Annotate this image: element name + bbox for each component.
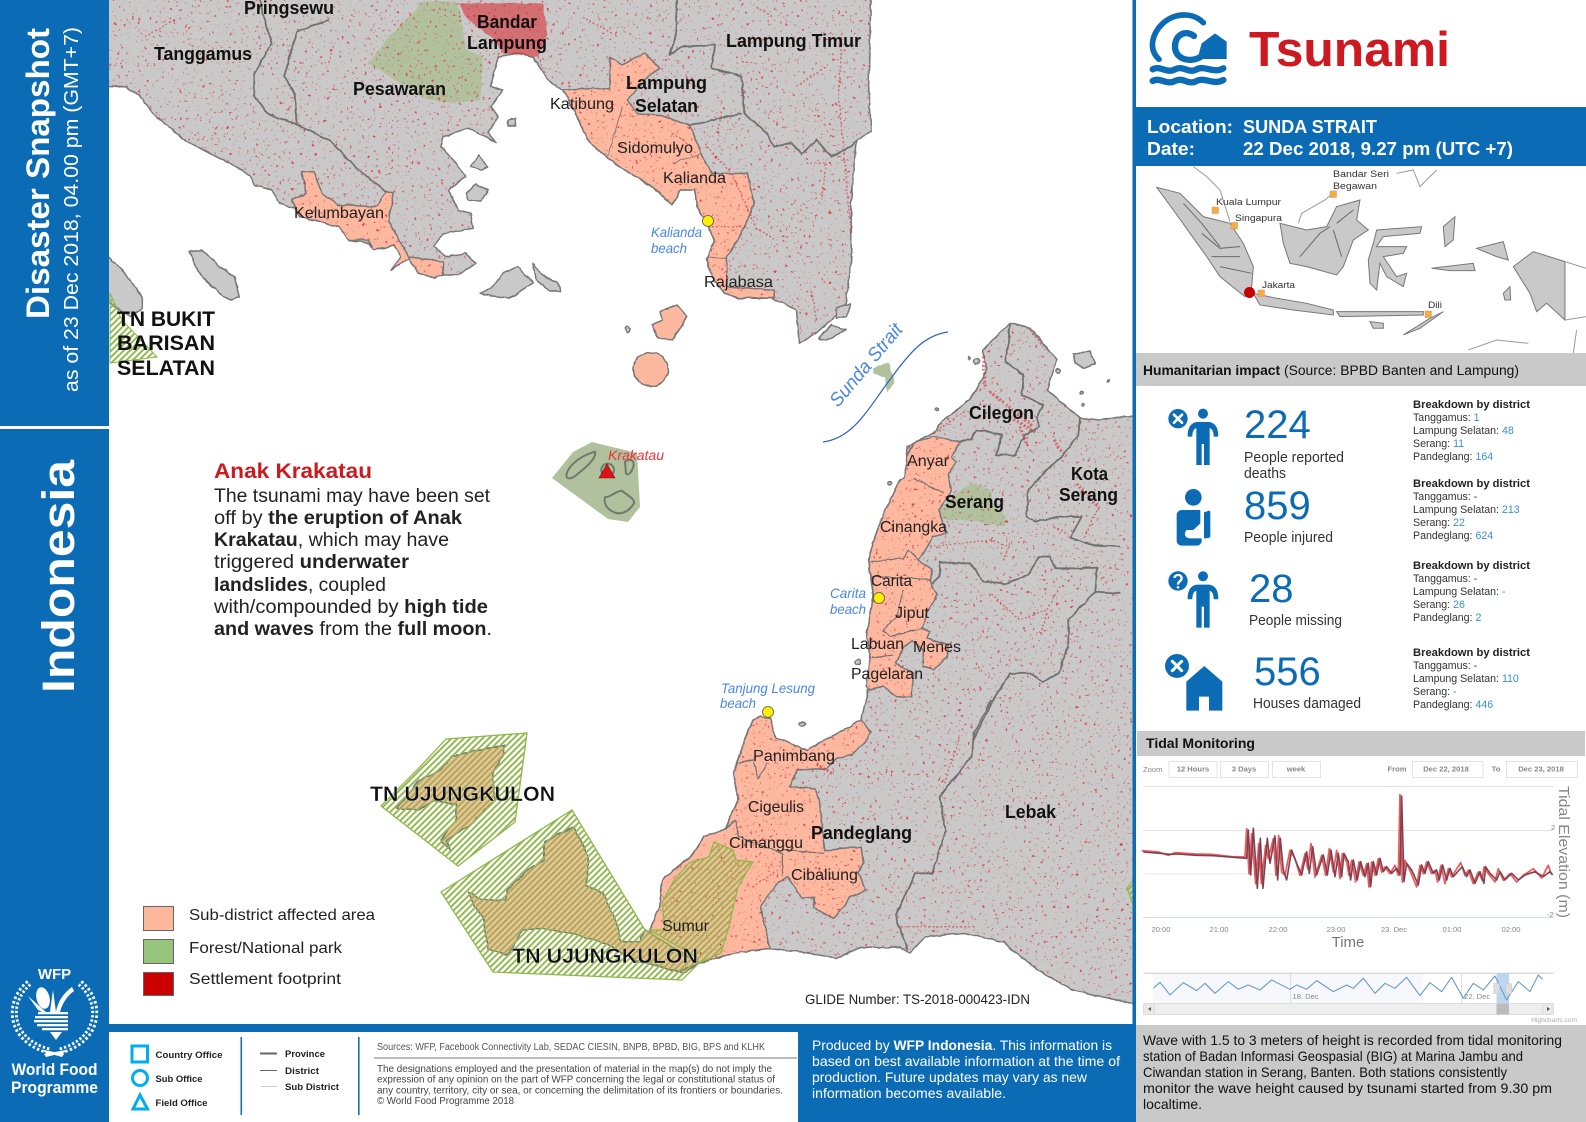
sidebar divider	[0, 426, 109, 429]
label: Rajabasa: Rajabasa	[704, 274, 773, 291]
label: Kalianda beach: beach	[651, 240, 687, 256]
map legend	[144, 906, 375, 996]
heading: Anak Krakatau: Anak Krakatau	[214, 460, 372, 483]
panel: tidal note: monitor the wave height caused by tsunami started from 9.30 pm	[1143, 1080, 1552, 1096]
small islands	[105, 118, 1109, 726]
text: missing caption: People missing	[1249, 613, 1342, 629]
chart navigator: 22. Dec	[1464, 992, 1490, 1001]
inset labels: Kuala Lumpur	[1216, 197, 1282, 208]
park: Sumur zone	[650, 842, 753, 963]
label: TN Bukit Barisan Selatan	[117, 308, 215, 380]
inset land masses	[1157, 167, 1586, 353]
breakdown: houses	[1413, 647, 1530, 711]
panel: WFP production note: production. Future updates may vary as new	[812, 1069, 1088, 1085]
office legend	[132, 1046, 222, 1109]
text block: Anak Krakatau explanation: landslides, coupled	[214, 575, 386, 596]
label: Krakatau: Krakatau	[608, 448, 664, 463]
text: disclaimer: any country, territory, city or sea, or concerning the delimitation of its frontiers or boundaries.	[377, 1086, 783, 1096]
text block: Anak Krakatau explanation: The tsunami may have been set	[214, 486, 491, 507]
breakdown: deaths: Pandeglang: 164	[1413, 451, 1493, 463]
panel: tidal note: Wave with 1.5 to 3 meters of height is recorded from tidal monitoring	[1143, 1032, 1562, 1048]
navigator scrollbar	[1144, 1004, 1554, 1014]
chart x axis: 23. Dec	[1381, 925, 1407, 934]
beach markers	[702, 216, 884, 718]
figure: injured: 859	[1244, 484, 1311, 528]
divider	[358, 1037, 360, 1115]
breakdown: missing: Tanggamus: -	[1413, 573, 1478, 585]
legend swatch: settlement	[144, 972, 174, 996]
inset labels: Singapura	[1235, 213, 1283, 224]
chart x axis: Time	[1332, 934, 1364, 951]
panel: tidal note	[1136, 1025, 1586, 1122]
icon: house damaged	[1165, 654, 1222, 711]
label: Bandar Lampung	[467, 12, 547, 53]
icon: tsunami	[1152, 15, 1227, 82]
label: Lebak: Lebak	[1005, 802, 1057, 822]
label: Cinangka: Cinangka	[880, 519, 947, 536]
park: TN Bukit Barisan Selatan	[110, 293, 157, 363]
logo text: World Food Programme: World Food	[12, 1061, 98, 1079]
chart zoom controls: Zoom	[1143, 765, 1162, 774]
label: Sidomulyo: Sidomulyo	[617, 140, 693, 157]
label: TN Ujungkulon lower: TN UJUNGKULON	[512, 945, 698, 968]
heading: Disaster Snapshot: Disaster Snapshot	[20, 28, 56, 319]
chart x axis: 01:00	[1442, 925, 1462, 934]
heading: tidal monitoring	[1137, 731, 1585, 756]
label: Kelumbayan: Kelumbayan	[294, 205, 384, 222]
chart x axis: 23:00	[1326, 925, 1346, 934]
chart navigator: 18. Dec	[1292, 992, 1319, 1001]
chart: tidal elevation	[1142, 762, 1578, 1024]
affected sub-district: Kelumbayan	[292, 172, 443, 278]
chart zoom controls: 3 Days	[1232, 764, 1256, 774]
breakdown: injured	[1413, 478, 1530, 542]
label: Tanjung Lesung beach: Tanjung Lesung	[721, 680, 815, 696]
legend swatch: forest	[144, 940, 174, 964]
label: TN Ujungkulon upper: TN UJUNGKULON	[370, 783, 555, 806]
map place labels	[117, 0, 1118, 968]
label: Sumur: Sumur	[662, 918, 710, 935]
panel: location and date: Location:	[1147, 117, 1233, 137]
legend text: sub-district affected area: Sub-district affected area	[189, 907, 375, 924]
panel: location and date: SUNDA STRAIT	[1243, 117, 1377, 137]
label: Bandar Lampung: Bandar	[477, 12, 537, 32]
label: Lampung Timur: Lampung Timur	[726, 31, 861, 51]
panel: location and date: 22 Dec 2018, 9.27 pm (UTC +7)	[1243, 139, 1513, 159]
label: Carita beach: Carita	[830, 585, 866, 601]
label: Sunda Strait: Sunda Strait	[826, 319, 908, 411]
text block: Anak Krakatau explanation	[213, 460, 492, 640]
label: Carita: Carita	[871, 573, 912, 590]
inset labels: Begawan	[1333, 181, 1377, 192]
chart gridlines	[1143, 786, 1553, 918]
breakdown: missing: Breakdown by district	[1413, 560, 1530, 572]
text: disclaimer	[377, 1064, 783, 1107]
text: district: District	[285, 1066, 320, 1077]
breakdown: deaths: Lampung Selatan: 48	[1413, 425, 1514, 437]
breakdown: injured: Serang: 22	[1413, 517, 1465, 529]
header: hazard title	[1152, 15, 1450, 82]
text block: Anak Krakatau explanation: triggered underwater	[214, 552, 410, 573]
land: southern Sumatra	[100, 0, 871, 343]
label: Kota Serang: Kota	[1071, 464, 1109, 484]
breakdown: missing: Lampung Selatan: -	[1413, 586, 1506, 598]
breakdown: injured: Pandeglang: 624	[1413, 530, 1493, 542]
panel: humanitarian impact figures	[1165, 399, 1530, 712]
text: deaths caption: People reported	[1244, 450, 1344, 466]
panel: map of the Sunda Strait	[100, 0, 1150, 1024]
text: sub office: Sub Office	[156, 1074, 202, 1085]
label: Panimbang: Panimbang	[753, 748, 835, 765]
label: Carita beach: beach	[830, 601, 866, 617]
icon: country office	[132, 1046, 148, 1062]
panel: location and date: Date:	[1147, 139, 1195, 159]
text: field office: Field Office	[156, 1098, 208, 1109]
chart x axis: 20:00	[1151, 925, 1171, 934]
label: Kota Serang: Serang	[1059, 485, 1118, 505]
chart y axis: 2	[1551, 823, 1555, 832]
panel: WFP production note: Produced by WFP Indonesia. This information is	[812, 1037, 1112, 1053]
heading: humanitarian impact: Humanitarian impact (Source: BPBD Banten and Lampung)	[1143, 363, 1519, 378]
figure: houses: 556	[1254, 650, 1321, 694]
label: Serang: Serang	[945, 492, 1004, 512]
inset labels: Dili	[1428, 300, 1442, 311]
text: deaths caption	[1244, 450, 1344, 482]
label: Pandeglang: Pandeglang	[811, 823, 912, 843]
inset labels	[1216, 169, 1442, 311]
panel: tidal note: localtime.	[1143, 1096, 1202, 1112]
breakdown: houses: Tanggamus: -	[1413, 660, 1478, 672]
breakdown: houses: Pandeglang: 446	[1413, 699, 1493, 711]
icon: volcano triangle	[599, 464, 615, 478]
text block: Anak Krakatau explanation: off by the eruption of Anak	[214, 508, 462, 529]
breakdown: deaths	[1413, 399, 1530, 463]
chart zoom controls: 12 Hours	[1177, 764, 1209, 774]
text: as of date: as of 23 Dec 2018, 04.00 pm (GMT+7)	[61, 27, 83, 392]
label: Tanjung Lesung beach: beach	[720, 695, 756, 711]
label: TN Bukit Barisan Selatan: BARISAN	[117, 332, 215, 355]
text: deaths caption: deaths	[1244, 466, 1286, 482]
logo text: World Food Programme: Programme	[11, 1079, 98, 1097]
chart x axis: 02:00	[1501, 925, 1521, 934]
Panaitan island	[397, 745, 505, 852]
panel: bottom strip	[109, 1024, 1136, 1122]
heading: tidal monitoring: Tidal Monitoring	[1146, 736, 1255, 751]
label: Lampung Selatan: Selatan	[635, 96, 698, 116]
logo: WFP	[11, 966, 98, 1097]
label: Anyar: Anyar	[907, 453, 950, 470]
text: houses caption: Houses damaged	[1253, 696, 1361, 712]
label: Labuan: Labuan	[851, 636, 904, 653]
chart zoom controls: Dec 22, 2018	[1423, 764, 1469, 774]
Krakatau islands	[567, 452, 634, 513]
GLIDE number: GLIDE Number: TS-2018-000423-IDN	[805, 991, 1030, 1007]
label: Pagelaran: Pagelaran	[851, 666, 923, 683]
label: TN Bukit Barisan Selatan: TN BUKIT	[117, 308, 215, 331]
text block: Anak Krakatau explanation: Krakatau, which may have	[214, 530, 449, 551]
icon: sub office	[132, 1070, 148, 1086]
logo emblem: corn, wheat and stripes	[28, 986, 74, 1057]
icon: field office	[133, 1095, 148, 1109]
panel: right column divider	[1132, 0, 1136, 1122]
forest areas	[369, 2, 1007, 527]
label: Tanjung Lesung beach	[720, 680, 815, 711]
chart zoom controls: To	[1492, 764, 1501, 774]
hatched national parks	[110, 293, 1133, 980]
panel: WFP production note	[798, 1032, 1136, 1122]
text: sources: Sources: WFP, Facebook Connectivity Lab, SEDAC CIESIN, BNPB, BPBD, BIG, BPS and KLHK	[377, 1042, 765, 1053]
park: TN Ujung Kulon Panaitan zone	[381, 733, 527, 866]
icon: person injured	[1177, 489, 1210, 546]
Krakatau forest polygon	[552, 442, 640, 522]
label: Lampung Selatan: Lampung	[626, 73, 707, 93]
panel: WFP production note: information becomes available.	[812, 1085, 1006, 1101]
inset labels: Bandar Seri	[1333, 169, 1389, 180]
breakdown: houses: Serang: -	[1413, 686, 1457, 698]
label: Pesawaran: Pesawaran	[353, 79, 446, 99]
icon: person deceased	[1168, 409, 1218, 465]
label: Carita beach	[830, 585, 866, 617]
chart y axis: Tidal Elevation (m)	[1555, 786, 1572, 918]
breakdown: injured: Breakdown by district	[1413, 478, 1530, 490]
label: Kalianda beach: Kalianda	[651, 224, 702, 240]
label: Katibung: Katibung	[550, 96, 614, 113]
text: disclaimer: © World Food Programme 2018	[377, 1096, 514, 1107]
logo emblem: wreath	[14, 983, 95, 1051]
chart navigator	[1143, 973, 1578, 1024]
label: TN Bukit Barisan Selatan: SELATAN	[117, 357, 215, 380]
affected sub-districts: Anyar to Pagelaran	[867, 437, 960, 697]
settlement footprint: dense urban areas and roads	[145, 3, 1100, 953]
panel: WFP production note: based on best available information at the time of	[812, 1053, 1120, 1069]
inset labels: Jakarta	[1262, 280, 1296, 291]
land: western Java	[660, 323, 1150, 1012]
chart y axis: -2	[1547, 910, 1554, 919]
heading: Tsunami: Tsunami	[1249, 23, 1450, 77]
label: Menes: Menes	[913, 639, 961, 656]
chart x axis: 22:00	[1268, 925, 1288, 934]
text block: Anak Krakatau explanation: and waves from the full moon.	[214, 619, 492, 640]
breakdown: deaths: Breakdown by district	[1413, 399, 1530, 411]
chart zoom controls	[1143, 762, 1578, 778]
inset map: Indonesia overview	[1157, 167, 1586, 353]
inset event marker	[1244, 287, 1255, 298]
label: Kalianda: Kalianda	[663, 170, 726, 187]
inset capital markers	[1212, 191, 1432, 318]
breakdown: injured: Tanggamus: -	[1413, 491, 1478, 503]
breakdown: houses: Breakdown by district	[1413, 647, 1530, 659]
icon: person missing	[1168, 571, 1218, 628]
Ujung Kulon peninsula	[468, 827, 699, 972]
text block: Anak Krakatau explanation: with/compounded by high tide	[213, 597, 488, 618]
chart navigator: Highcharts.com	[1531, 1017, 1578, 1024]
breakdown: houses: Lampung Selatan: 110	[1413, 673, 1519, 685]
text: disclaimer: The designations employed and the presentation of material in the map(s) do not imply the	[377, 1064, 772, 1075]
park edge at right margin	[1127, 880, 1133, 905]
label: Cilegon: Cilegon	[969, 403, 1034, 423]
label: Cigeulis: Cigeulis	[748, 799, 804, 816]
chart zoom controls: week	[1286, 764, 1306, 774]
text: injured caption: People injured	[1244, 530, 1333, 546]
district and sub-district boundaries	[254, 0, 1120, 950]
park: TN Ujung Kulon main zone	[441, 810, 699, 980]
label: Bandar Lampung: Lampung	[467, 33, 547, 53]
heading: Indonesia: Indonesia	[33, 459, 84, 693]
settlement footprint speckle	[109, 0, 1135, 1024]
label: Cimanggu: Cimanggu	[729, 835, 803, 852]
chart zoom controls: From	[1388, 764, 1407, 774]
figure: missing: 28	[1249, 567, 1294, 611]
logo text: WFP: WFP	[38, 966, 71, 983]
label: Kota Serang	[1059, 464, 1118, 505]
logo text: World Food Programme	[11, 1061, 98, 1097]
label: Tanggamus: Tanggamus	[154, 44, 252, 64]
chart x axis: 21:00	[1209, 925, 1229, 934]
map land layers	[100, 0, 1150, 1024]
legend text: settlement: Settlement footprint	[189, 971, 342, 988]
text: sub district: Sub District	[285, 1082, 340, 1093]
panel: left sidebar	[0, 0, 109, 1122]
label: Kalianda beach	[651, 224, 702, 256]
affected islands: Sebesi and Sebuku	[633, 305, 687, 386]
breakdown: deaths: Tanggamus: 1	[1413, 412, 1480, 424]
breakdown: injured: Lampung Selatan: 213	[1413, 504, 1520, 516]
affected sub-districts: Lampung Selatan	[563, 53, 774, 298]
chart y axis	[1547, 786, 1572, 919]
legend text: forest: Forest/National park	[189, 940, 343, 957]
Sunda Strait curve	[823, 332, 948, 442]
divider	[240, 1037, 242, 1115]
figure: deaths: 224	[1244, 403, 1311, 447]
Krakatau group	[552, 442, 664, 522]
breakdown: missing: Pandeglang: 2	[1413, 612, 1481, 624]
text: disclaimer: expression of any opinion on the part of WFP concerning the legal or constitutional status of	[377, 1074, 775, 1086]
boundary legend	[260, 1049, 340, 1093]
label: Cibaliung: Cibaliung	[791, 867, 858, 884]
chart series	[1142, 795, 1553, 888]
legend swatch: sub-district affected area	[144, 906, 174, 930]
affected sub-districts: Panimbang to Cibaliung	[635, 717, 871, 973]
text: country office: Country Office	[156, 1050, 222, 1061]
text: province: Province	[285, 1049, 325, 1060]
breakdown: deaths: Serang: 11	[1413, 438, 1464, 450]
panel: tidal note: Ciwandan station in Serang, Banten. Both stations consistently	[1143, 1064, 1507, 1080]
heading: humanitarian impact	[1136, 353, 1586, 386]
label: Jiput: Jiput	[895, 605, 930, 622]
label: Lampung Selatan	[627, 76, 706, 112]
chart zoom controls: Dec 23, 2018	[1518, 764, 1564, 774]
breakdown: missing	[1413, 560, 1530, 624]
breakdown: missing: Serang: 26	[1413, 599, 1465, 611]
chart x axis	[1151, 925, 1521, 951]
panel: location and date	[1136, 107, 1586, 166]
panel: tidal note: station of Badan Informasi Geospasial (BIG) at Marina Jambu and	[1143, 1048, 1523, 1064]
